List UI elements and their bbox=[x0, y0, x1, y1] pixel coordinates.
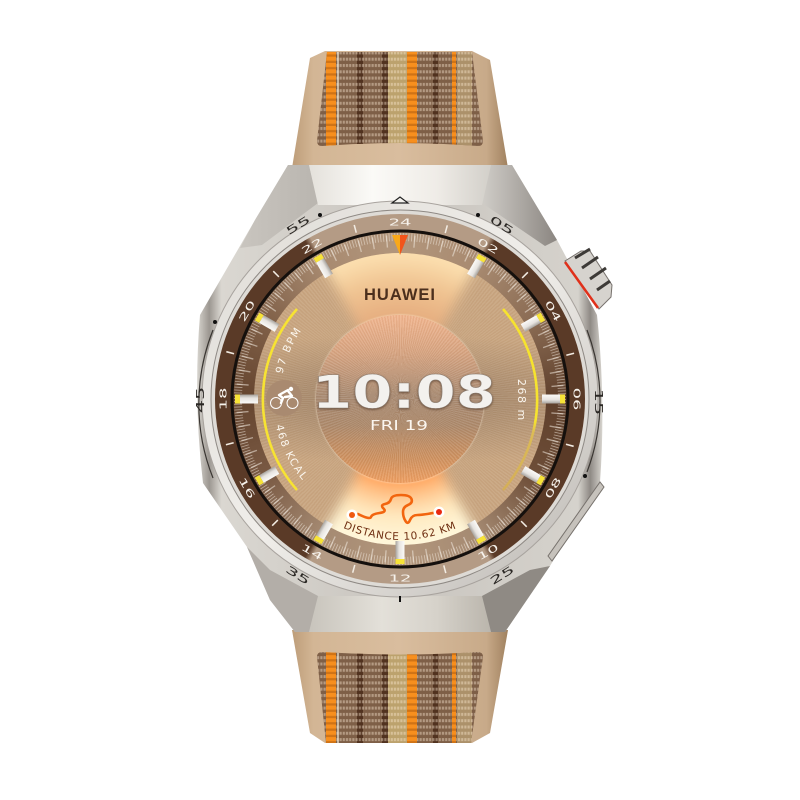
bezel side shadows bbox=[199, 330, 600, 478]
bezel numbers bbox=[194, 213, 605, 587]
24 hour numerals: 18 bbox=[218, 388, 229, 410]
watch strap, case and bezel bbox=[196, 51, 612, 743]
central disc bbox=[316, 315, 484, 483]
woven stripes: top bbox=[315, 50, 485, 150]
black ring bbox=[232, 231, 568, 567]
24 hour numerals: 12 bbox=[389, 573, 411, 584]
dial bright wedges bbox=[322, 253, 479, 545]
24 hour numerals: 22 bbox=[300, 236, 325, 257]
calories label: 468 KCAL bbox=[276, 425, 306, 480]
24 hour numerals: 20 bbox=[237, 299, 258, 324]
orange top marker bbox=[392, 235, 408, 255]
24 hour numerals bbox=[218, 217, 582, 584]
strap: bottom bbox=[292, 630, 508, 745]
outer ring ticks bbox=[224, 223, 576, 575]
24 hour numerals: 06 bbox=[571, 388, 582, 410]
24 hour numerals: 08 bbox=[543, 476, 564, 501]
case body bbox=[197, 165, 602, 632]
bezel numbers: 15 bbox=[593, 389, 605, 415]
crown bbox=[565, 249, 612, 309]
strap: top bbox=[292, 50, 508, 168]
altitude label: 268 m bbox=[515, 379, 528, 422]
bezel numbers: 05 bbox=[487, 213, 516, 237]
bezel numbers: 25 bbox=[488, 563, 517, 587]
woven stripes: bottom bbox=[315, 650, 485, 745]
yellow progress arcs bbox=[263, 309, 537, 490]
route map bbox=[346, 495, 444, 523]
bezel numbers: 45 bbox=[194, 387, 206, 413]
bezel bbox=[202, 201, 598, 597]
fine tick scale bbox=[238, 237, 562, 561]
heart rate label: 97 BPM bbox=[276, 328, 300, 373]
24 hour numerals: 04 bbox=[542, 299, 563, 324]
24 hour numerals: 14 bbox=[299, 542, 324, 563]
24 hour numerals: 10 bbox=[476, 542, 501, 563]
hour bars bbox=[235, 254, 565, 564]
bezel markers bbox=[213, 197, 587, 602]
bezel numbers: 35 bbox=[283, 563, 312, 587]
date: FRI 19 bbox=[370, 419, 428, 434]
chapter ring bbox=[232, 231, 568, 567]
lug facets bbox=[240, 165, 557, 632]
time: 10:08 bbox=[312, 366, 496, 419]
24 hour numerals: 16 bbox=[236, 476, 257, 501]
outer dial ring bbox=[215, 214, 585, 584]
sunburst dial bbox=[254, 253, 546, 545]
24 hour numerals: 24 bbox=[389, 217, 411, 228]
brand name: HUAWEI bbox=[364, 286, 436, 304]
distance label: DISTANCE 10.62 KM bbox=[344, 521, 456, 540]
side button bbox=[548, 482, 604, 561]
icon: cyclist bbox=[266, 380, 302, 416]
bezel numbers: 55 bbox=[284, 213, 313, 237]
24 hour numerals: 02 bbox=[475, 236, 500, 257]
